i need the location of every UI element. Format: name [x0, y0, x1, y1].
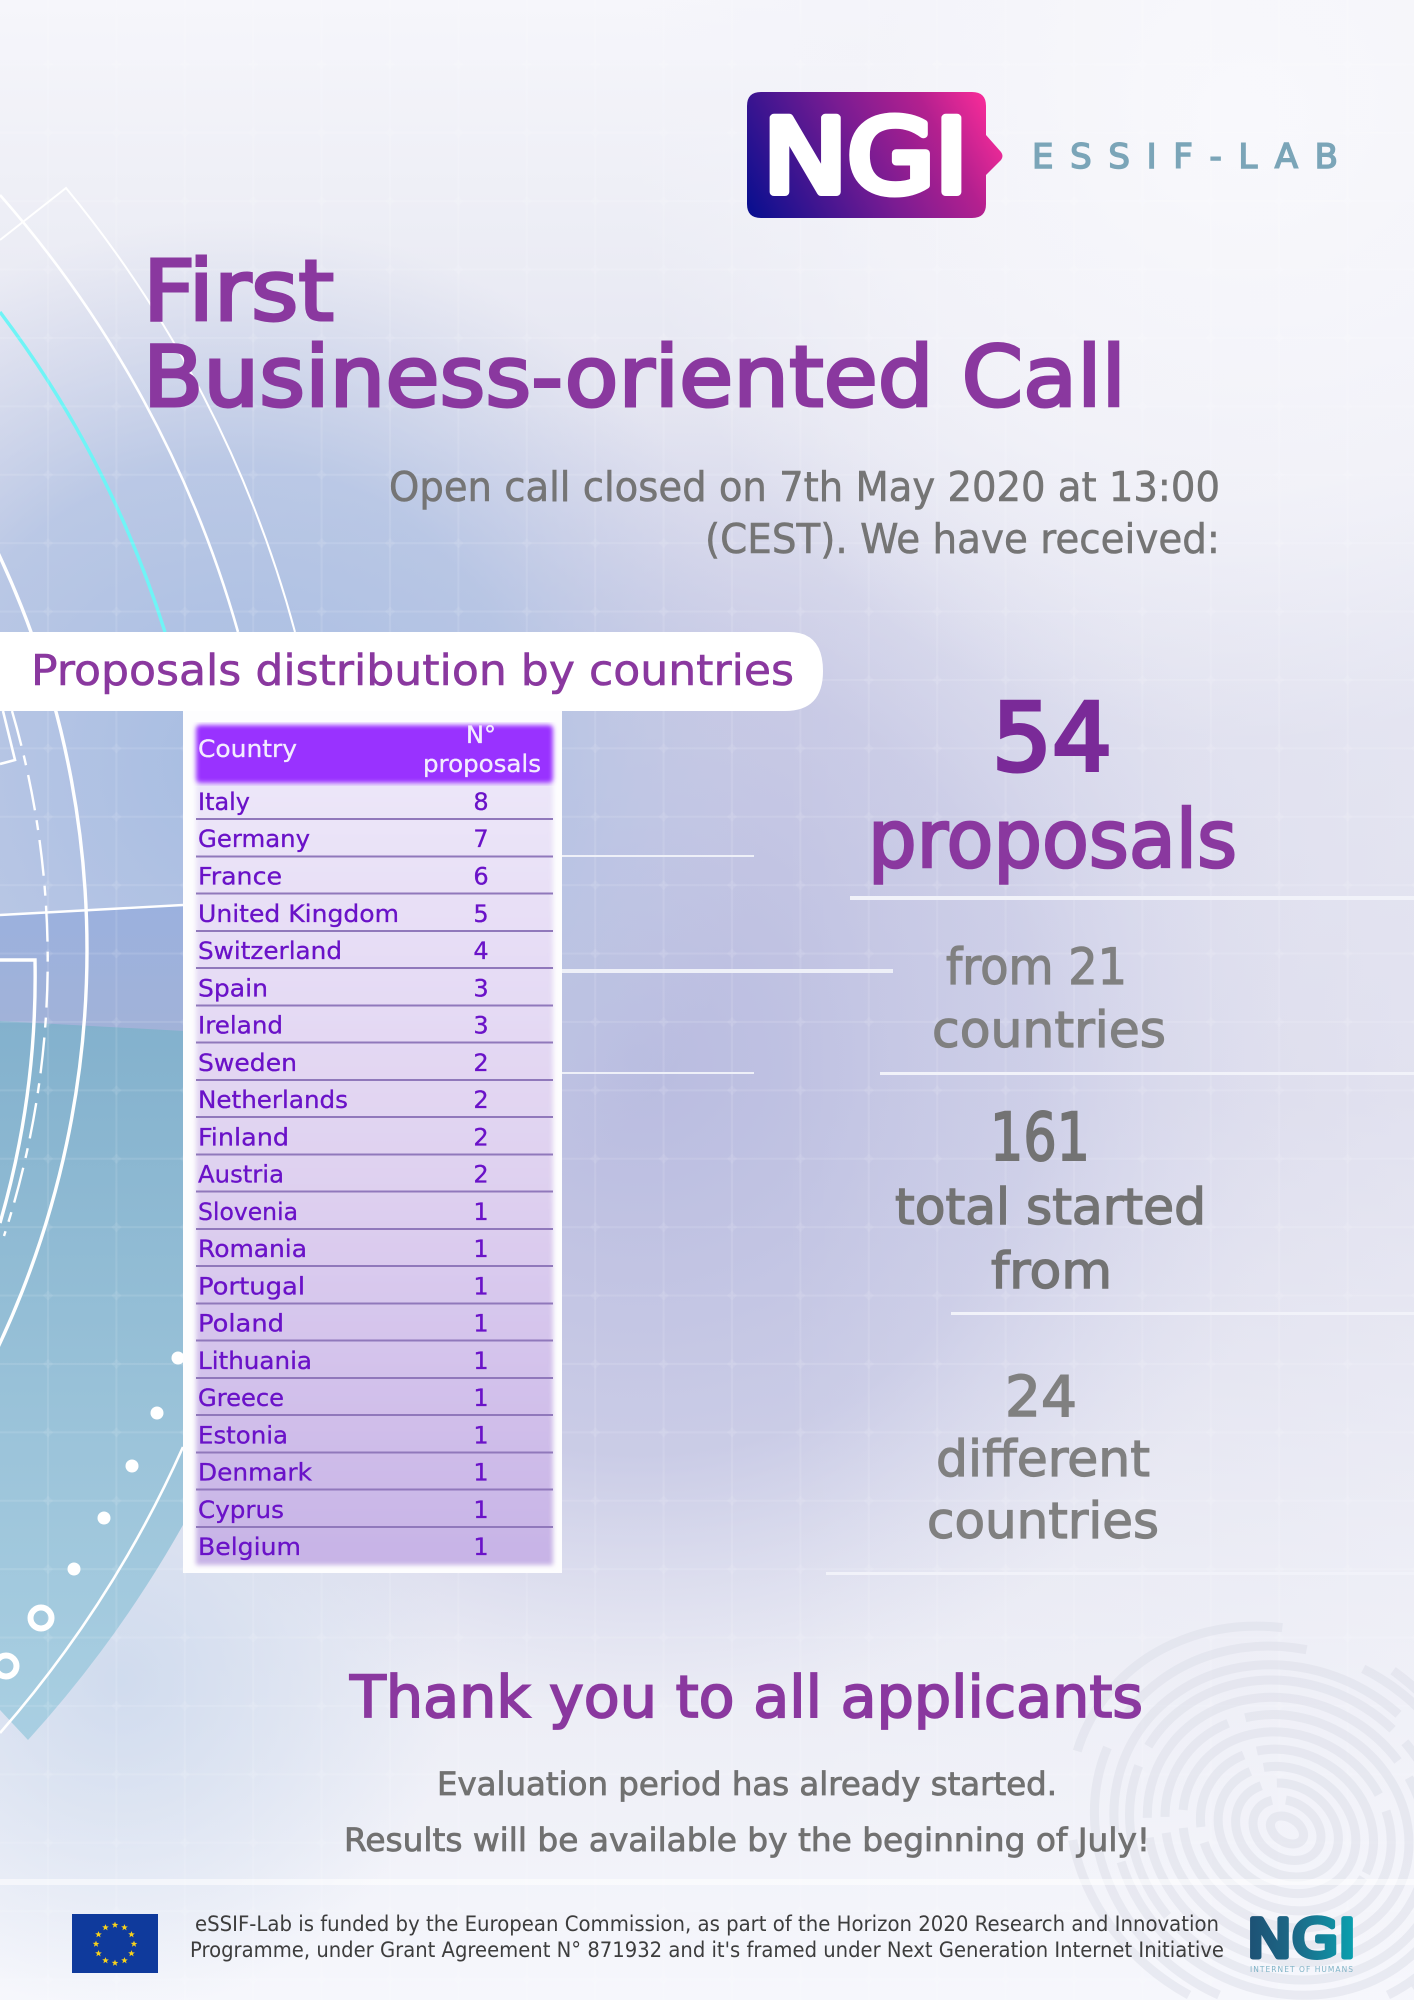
logo: NGI Internet of Humans: INTERNET OF HUMANS — [1250, 1965, 1353, 1974]
row: Netherlands — [198, 1086, 489, 1114]
row: France: 6 — [473, 862, 489, 890]
row: Denmark: Denmark — [198, 1458, 312, 1486]
row: Germany — [198, 825, 489, 853]
row: Germany: Germany — [198, 825, 310, 853]
table header — [198, 721, 541, 778]
table header: proposals — [423, 750, 541, 778]
row: Romania: 1 — [473, 1235, 489, 1263]
row: Ireland — [198, 1012, 489, 1040]
connector lines — [560, 855, 893, 1074]
table: proposals by country — [183, 711, 562, 1573]
row: Greece — [198, 1384, 489, 1412]
row: Lithuania: Lithuania — [198, 1347, 312, 1375]
row: Portugal — [198, 1272, 489, 1300]
footer divider — [0, 1879, 1414, 1885]
stat: 161 total started from: 161 — [990, 1099, 1090, 1176]
fingerprint watermark — [1051, 1600, 1414, 2000]
logo: NGI Internet of Humans: NGI — [1247, 1909, 1356, 1970]
row: Italy — [198, 788, 489, 816]
row: Finland: 2 — [473, 1124, 489, 1152]
row: Austria: 2 — [473, 1160, 489, 1188]
closing text — [344, 1765, 1150, 1859]
row: United Kingdom: United Kingdom — [198, 900, 399, 928]
row: Ireland: 3 — [473, 1012, 489, 1040]
logo: NGI eSSIF-Lab: ESSIF-LAB — [1032, 137, 1338, 177]
row: Greece: 1 — [473, 1384, 489, 1412]
section heading pill — [0, 632, 823, 711]
stat: 24 different countries — [826, 1365, 1414, 1575]
row: Sweden — [198, 1049, 489, 1077]
stat: 161 total started from: total started — [895, 1178, 1206, 1236]
row: Romania: Romania — [198, 1235, 307, 1263]
row: France: France — [198, 862, 282, 890]
row: Cyprus: Cyprus — [198, 1496, 284, 1524]
row: France — [198, 862, 489, 890]
row: Austria: Austria — [198, 1160, 284, 1188]
row: Estonia: Estonia — [198, 1422, 288, 1450]
title — [143, 242, 1126, 426]
stat: 161 total started from: from — [991, 1242, 1112, 1300]
row: Lithuania — [198, 1347, 489, 1375]
decorative circuit shapes on the left — [0, 19, 340, 1881]
row: Portugal: 1 — [473, 1272, 489, 1300]
row: Poland — [198, 1310, 489, 1338]
stat: from 21 countries: from 21 — [946, 938, 1127, 996]
row: Estonia: 1 — [473, 1422, 489, 1450]
row: Switzerland: 4 — [473, 937, 489, 965]
closing heading: Thank you to all applicants — [349, 1663, 1143, 1731]
logo: NGI eSSIF-Lab: NGI — [763, 98, 968, 217]
row: Lithuania: 1 — [473, 1347, 489, 1375]
row: Italy: 8 — [473, 788, 489, 816]
row: Italy: Italy — [198, 788, 250, 816]
stat: 54 proposals: proposals — [868, 793, 1237, 886]
row: Germany: 7 — [473, 825, 489, 853]
row: Sweden: 2 — [473, 1049, 489, 1077]
stat: from 21 countries — [880, 938, 1414, 1075]
stat: 54 proposals: 54 — [992, 684, 1112, 793]
row: Spain: Spain — [198, 974, 268, 1002]
row: Cyprus: 1 — [473, 1496, 489, 1524]
section heading pill: Proposals distribution by countries — [31, 646, 794, 696]
row: Greece: Greece — [198, 1384, 284, 1412]
stat: 24 different countries: 24 — [1005, 1365, 1077, 1430]
footer text: eSSIF-Lab is funded by the European Commission, as part of the Horizon 2020 Research and Innovation — [195, 1912, 1219, 1936]
footer text — [190, 1912, 1224, 1962]
intro text: Open call closed on 7th May 2020 at 13:00 — [389, 463, 1220, 511]
row: Cyprus — [198, 1496, 489, 1524]
row: Netherlands: Netherlands — [198, 1086, 348, 1114]
intro text — [389, 463, 1220, 563]
row: Romania — [198, 1235, 489, 1263]
row: Spain — [198, 974, 489, 1002]
row: Poland: 1 — [473, 1310, 489, 1338]
row: Slovenia: Slovenia — [198, 1198, 298, 1226]
row separators — [196, 819, 553, 1527]
row: United Kingdom — [198, 900, 489, 928]
title: Business-oriented Call — [143, 328, 1126, 426]
row: Belgium: Belgium — [198, 1533, 301, 1561]
row: United Kingdom: 5 — [473, 900, 489, 928]
closing text: Results will be available by the beginning of July! — [344, 1821, 1150, 1859]
row: Belgium — [198, 1533, 489, 1561]
stat: 54 proposals — [850, 684, 1414, 900]
row: Poland: Poland — [198, 1310, 284, 1338]
row: Finland — [198, 1124, 489, 1152]
closing text: Evaluation period has already started. — [437, 1765, 1057, 1803]
row: Estonia — [198, 1422, 489, 1450]
row: Denmark: 1 — [473, 1458, 489, 1486]
row: Switzerland — [198, 937, 489, 965]
row: Portugal: Portugal — [198, 1272, 305, 1300]
row: Slovenia: 1 — [473, 1198, 489, 1226]
row: Belgium: 1 — [473, 1533, 489, 1561]
table header: N° — [466, 721, 496, 749]
title: First — [143, 242, 334, 340]
footer text: Programme, under Grant Agreement N° 871932 and it's framed under Next Generation Internet Initiative — [190, 1938, 1224, 1962]
table header: Country — [198, 735, 297, 763]
row: Ireland: Ireland — [198, 1012, 283, 1040]
stat: from 21 countries: countries — [932, 1001, 1166, 1059]
row: Slovenia — [198, 1198, 489, 1226]
row: Denmark — [198, 1458, 489, 1486]
logo: NGI eSSIF-Lab — [747, 92, 1338, 218]
row: Finland: Finland — [198, 1124, 289, 1152]
row: Switzerland: Switzerland — [198, 937, 342, 965]
icon: EU flag — [72, 1914, 158, 1973]
intro text: (CEST). We have received: — [705, 515, 1220, 563]
row: Netherlands: 2 — [473, 1086, 489, 1114]
stat: 24 different countries: different — [936, 1430, 1150, 1488]
row: Austria — [198, 1160, 489, 1188]
row: Sweden: Sweden — [198, 1049, 297, 1077]
stat: 24 different countries: countries — [927, 1492, 1159, 1550]
stat: 161 total started from — [895, 1099, 1414, 1315]
row: Spain: 3 — [473, 974, 489, 1002]
